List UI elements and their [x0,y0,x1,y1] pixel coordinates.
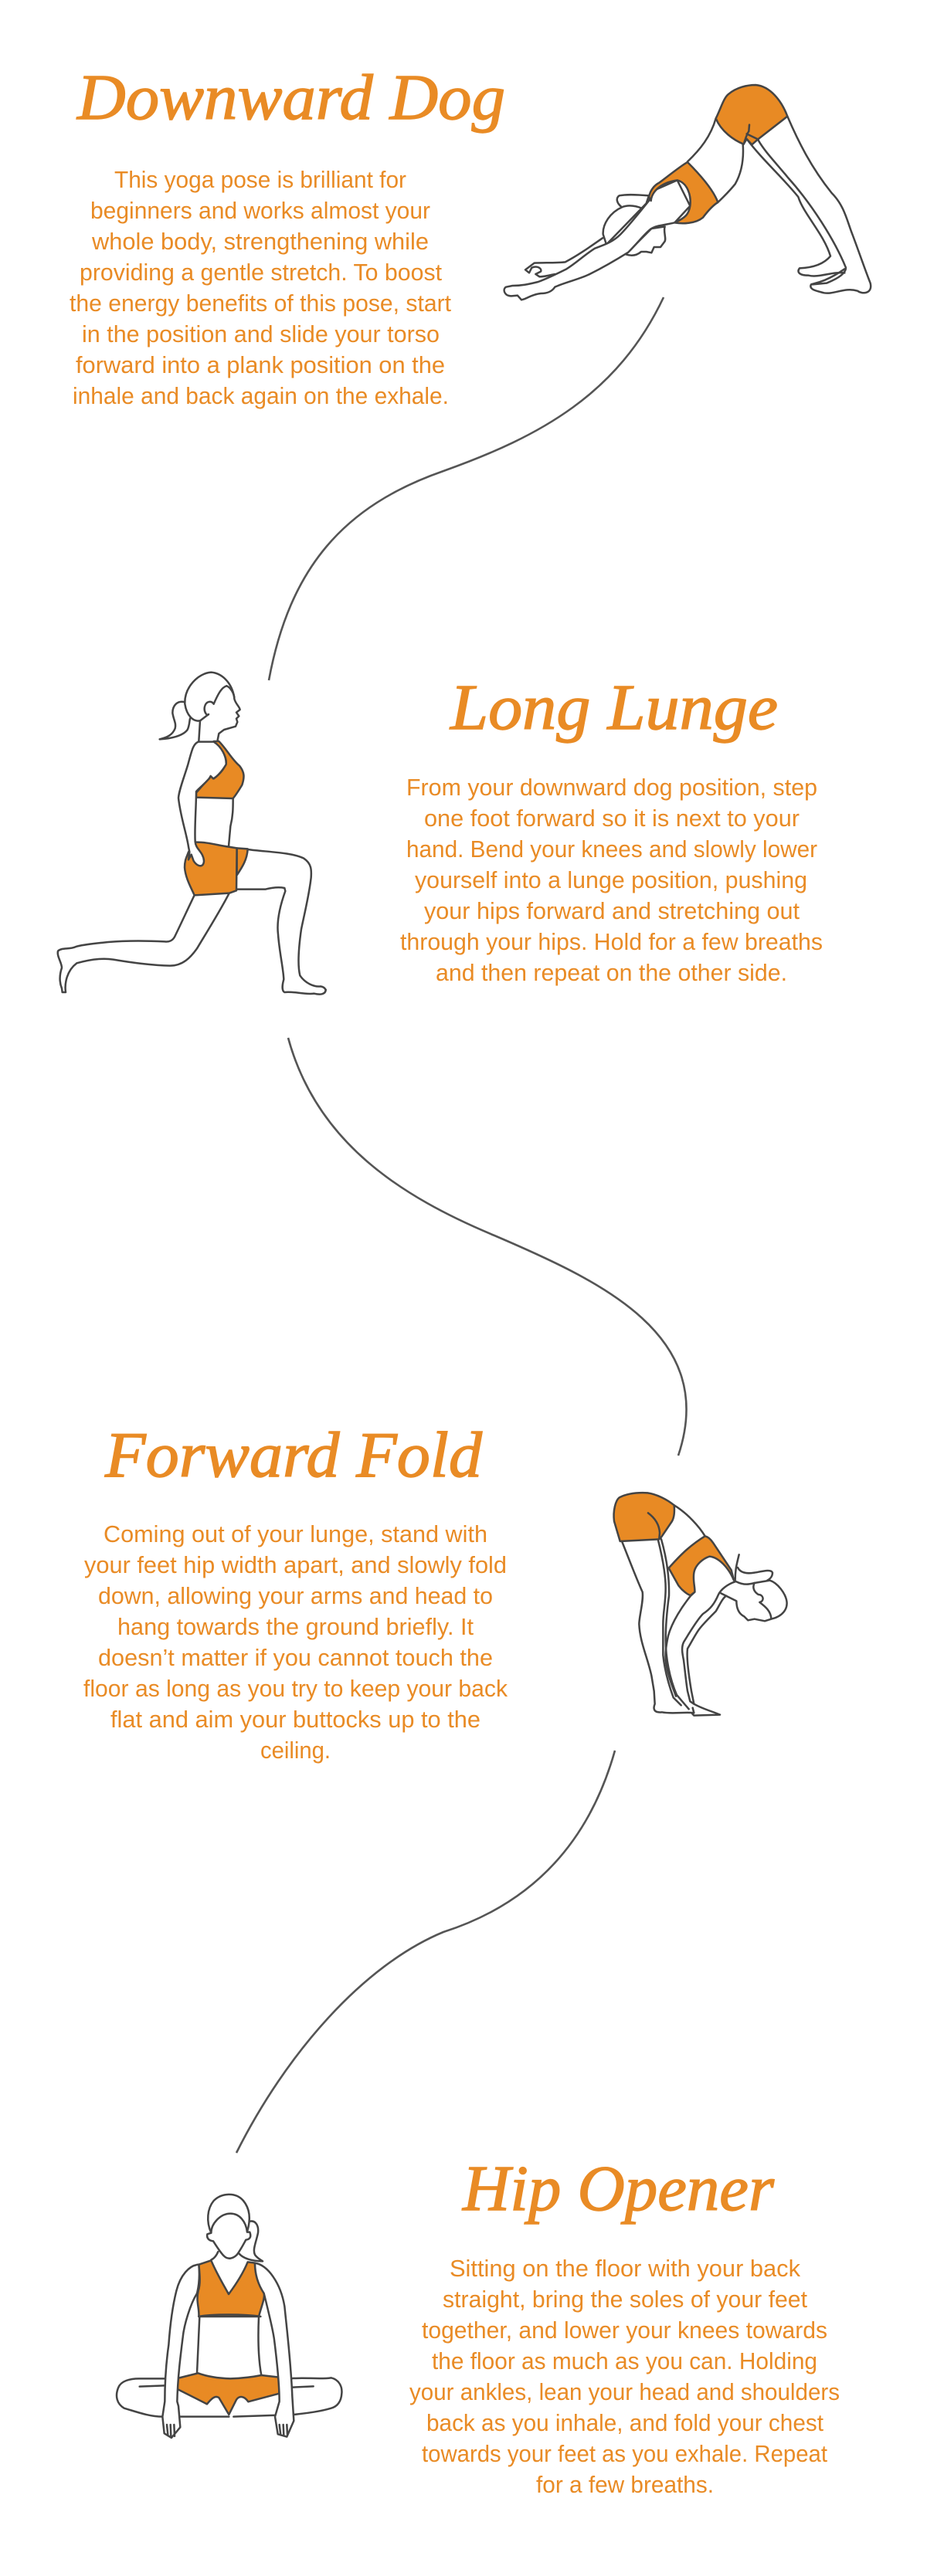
text block: forward fold: flat and aim your buttocks up to the [110,1707,480,1733]
icon: hip opener figure [117,2195,341,2438]
text block: forward fold: hang towards the ground briefly. It [117,1614,474,1640]
heading: forward fold: Forward Fold [104,1419,483,1491]
text block: forward fold: floor as long as you try to keep your back [83,1676,508,1702]
text block: forward fold [83,1521,508,1764]
text block: hip opener [409,2256,840,2498]
text block: forward fold: down, allowing your arms and head to [98,1583,493,1609]
text block: hip opener: towards your feet as you exhale. Repeat [422,2441,828,2467]
arrow: curve from long lunge to forward fold [288,1038,687,1456]
text block: hip opener: your ankles, lean your head and shoulders [409,2379,840,2405]
text block: long lunge: yourself into a lunge position, pushing [415,867,807,893]
text block: forward fold: your feet hip width apart, and slowly fold [84,1552,507,1578]
heading: downward dog: Downward Dog [76,62,505,134]
text block: downward dog: providing a gentle stretch. To boost [80,259,443,286]
text block: hip opener: for a few breaths. [536,2472,714,2498]
text block: forward fold: Coming out of your lunge, stand with [104,1521,487,1547]
text block: long lunge: and then repeat on the other side. [436,960,787,986]
text block: forward fold: doesn’t matter if you cannot touch the [98,1645,493,1671]
icon: forward fold figure [614,1493,787,1716]
text block: hip opener: the floor as much as you can. Holding [432,2348,817,2374]
text block: long lunge: hand. Bend your knees and slowly lower [406,836,817,863]
panel: hip opener [117,2153,840,2498]
text block: hip opener: Sitting on the floor with your back [450,2256,801,2282]
text block: forward fold: ceiling. [260,1737,331,1764]
panel: forward fold [83,1419,787,1764]
text block: hip opener: together, and lower your knees towards [422,2317,827,2344]
text block: long lunge: one foot forward so it is next to your [424,805,800,832]
heading: long lunge: Long Lunge [450,672,778,744]
text block: downward dog: beginners and works almost your [90,198,430,224]
text block: long lunge: From your downward dog position, step [406,774,817,801]
text block: downward dog [70,167,452,409]
text block: downward dog: inhale and back again on the exhale. [73,383,449,409]
heading: hip opener: Hip Opener [462,2153,774,2225]
arrow: curve from downward dog to long lunge [269,297,664,680]
icon: downward dog figure [504,85,871,300]
arrow: curve from forward fold to hip opener [236,1751,615,2153]
panel: downward dog [70,62,871,409]
text block: long lunge: through your hips. Hold for a few breaths [400,929,823,955]
text block: downward dog: in the position and slide your torso [82,321,440,347]
text block: downward dog: the energy benefits of this pose, start [70,290,452,317]
text block: downward dog: whole body, strengthening while [91,229,429,255]
text block: hip opener: straight, bring the soles of your feet [443,2286,808,2313]
text block: long lunge: your hips forward and stretching out [424,898,800,924]
text block: long lunge [400,774,823,986]
text block: downward dog: This yoga pose is brilliant for [114,167,406,193]
panel: long lunge [58,672,823,995]
text block: downward dog: forward into a plank position on the [76,352,445,378]
icon: long lunge figure [58,673,326,995]
text block: hip opener: back as you inhale, and fold your chest [426,2410,824,2436]
